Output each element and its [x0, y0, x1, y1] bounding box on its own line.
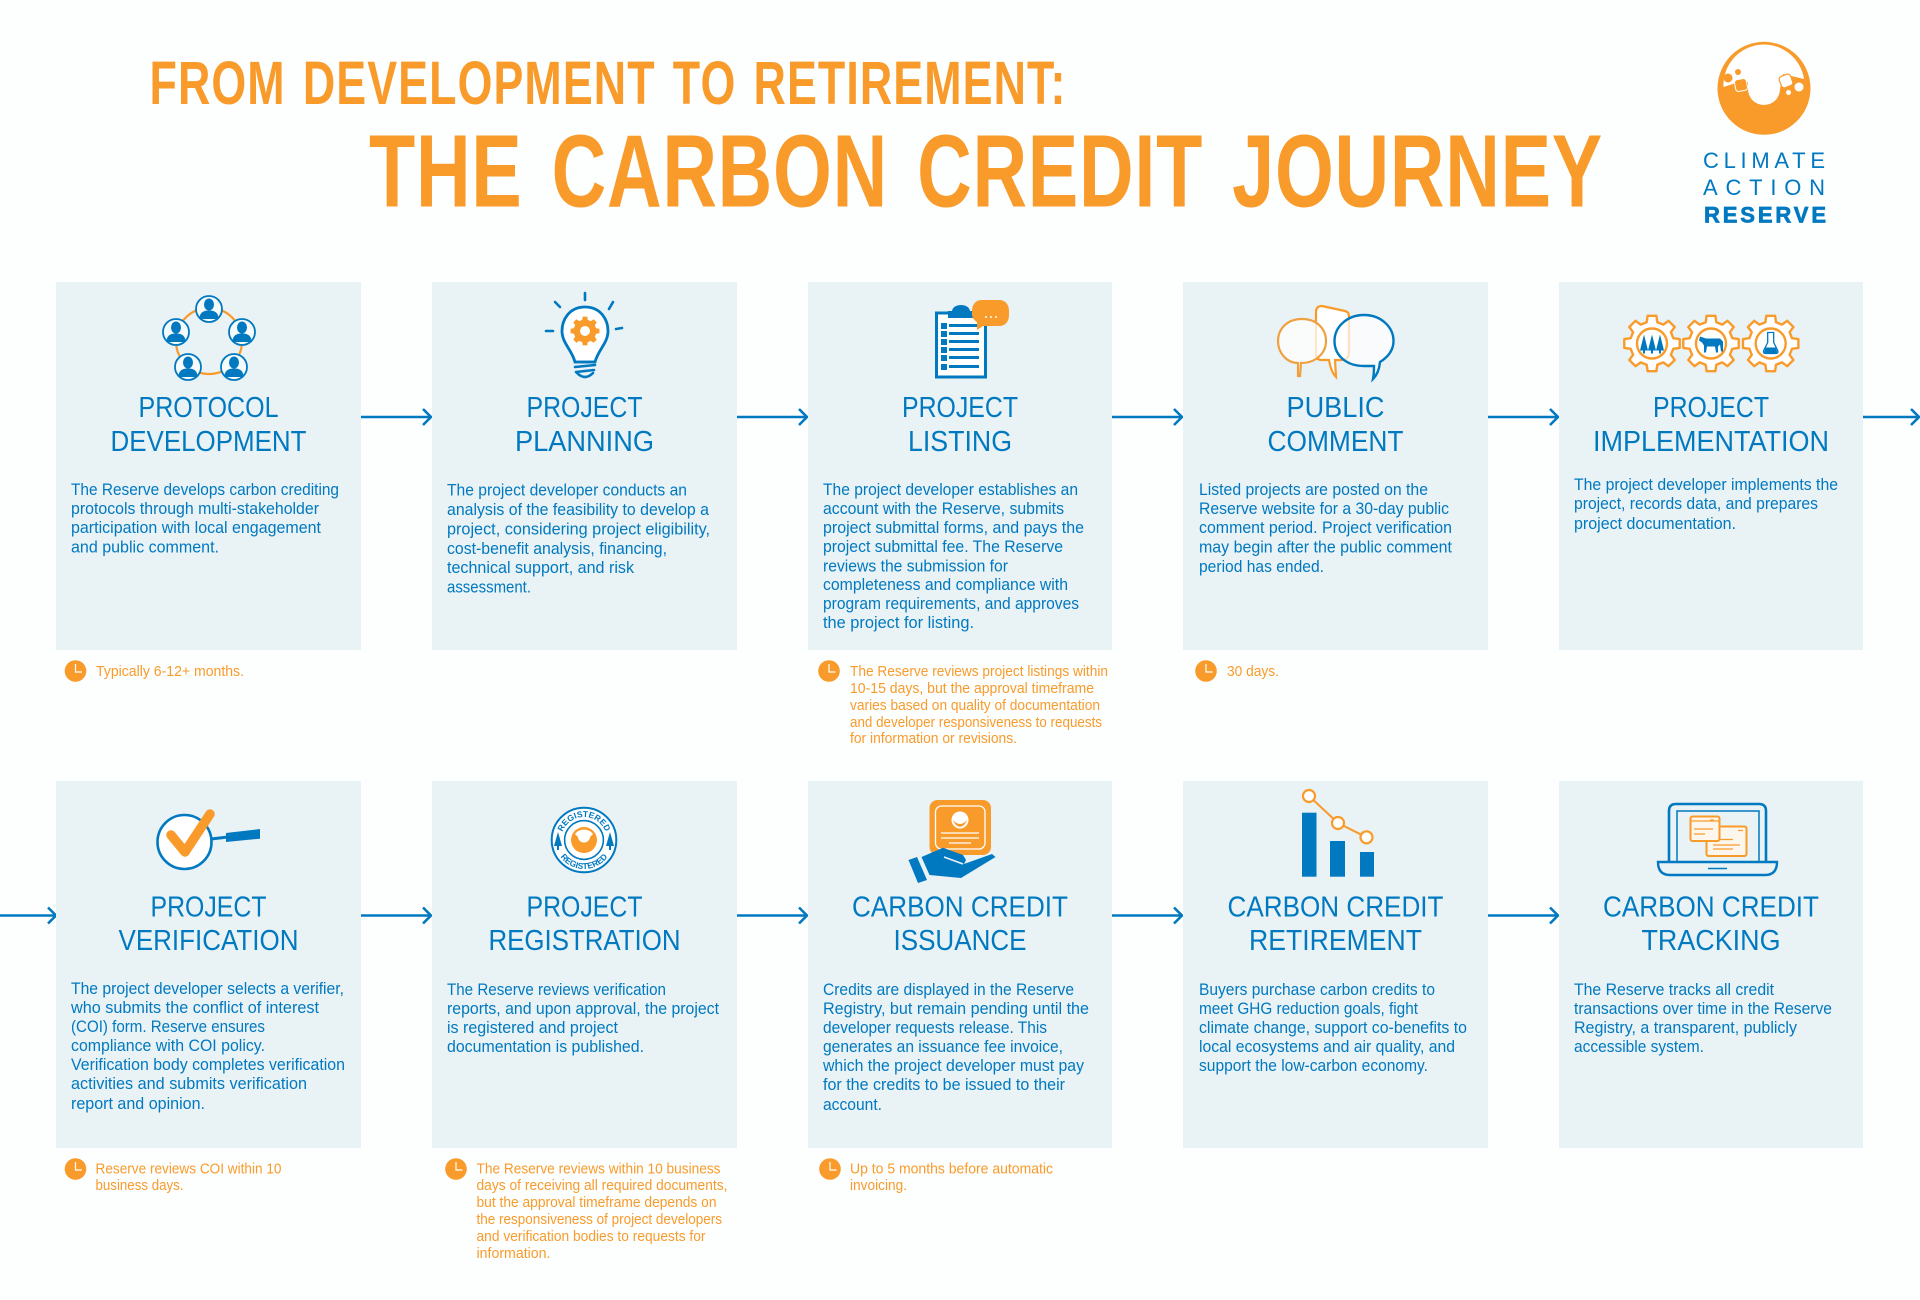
body text: the project for listing.: [823, 613, 974, 632]
body text: who submits the conflict of interest: [70, 998, 319, 1017]
logo wordmark: RESERVE: [1704, 202, 1826, 228]
arrow: [1112, 409, 1182, 425]
icon: clock: [445, 1158, 467, 1180]
heading: [902, 392, 1018, 458]
logo: Climate Action Reserve: [1703, 42, 1826, 228]
body text: [1199, 980, 1467, 1075]
body text: analysis of the feasibility to develop a: [447, 500, 710, 519]
body text: Registry, but remain pending until the: [823, 999, 1089, 1018]
arrow: [737, 409, 807, 425]
body text: The project developer establishes an: [823, 480, 1078, 499]
panel: carbon credit issuance: [808, 781, 1112, 1148]
arrow: [361, 409, 431, 425]
arrow: [361, 908, 431, 924]
body text: [70, 979, 345, 1113]
panel background: [56, 282, 361, 650]
icon: light bulb with gear: [546, 293, 622, 377]
note text: [476, 1160, 728, 1262]
panel background: [1559, 781, 1863, 1148]
logo wordmark: CLIMATE: [1703, 148, 1825, 173]
body text: [1574, 980, 1832, 1056]
icon: clock: [65, 1158, 86, 1180]
icon: declining bar chart: [1302, 790, 1374, 877]
body text: may begin after the public comment: [1199, 538, 1452, 556]
body text: which the project developer must pay: [822, 1056, 1084, 1075]
body text: meet GHG reduction goals, fight: [1199, 999, 1418, 1018]
heading: CARBON CREDIT: [852, 892, 1068, 924]
heading: [1268, 392, 1404, 458]
body text: generates an issuance fee invoice,: [823, 1037, 1063, 1056]
heading: PROJECT: [1653, 392, 1769, 424]
heading: TRACKING: [1642, 925, 1780, 957]
icon: laptop with windows: [1658, 804, 1777, 875]
icon: three gears: [1624, 316, 1798, 371]
body text: comment period. Project verification: [1199, 518, 1452, 537]
note text: and developer responsiveness to requests: [850, 714, 1102, 731]
body text: Registry, a transparent, publicly: [1574, 1018, 1797, 1037]
note text: The Reserve reviews within 10 business: [476, 1160, 720, 1178]
body text: [1199, 480, 1452, 576]
heading: [852, 892, 1068, 957]
heading: PROTOCOL: [138, 392, 278, 424]
note text: invoicing.: [850, 1177, 907, 1194]
note text: information.: [476, 1245, 550, 1262]
body text: The Reserve develops carbon crediting: [71, 480, 339, 499]
note text: the responsiveness of project developers: [476, 1211, 722, 1228]
body text: account.: [823, 1095, 882, 1114]
heading: [118, 892, 298, 957]
arrow: [1112, 908, 1182, 924]
panel: project verification: [56, 781, 361, 1148]
panel background: [808, 781, 1112, 1148]
panel background: [808, 282, 1112, 650]
note text: [96, 1160, 282, 1194]
note text: 10-15 days, but the approval timeframe: [850, 680, 1094, 697]
body text: The project developer conducts an: [447, 480, 687, 500]
body text: is registered and project: [447, 1018, 618, 1037]
body text: compliance with COI policy.: [71, 1036, 265, 1055]
icon: registered seal: REGISTERED: [557, 811, 610, 832]
heading: CARBON CREDIT: [1603, 892, 1819, 924]
body text: The Reserve tracks all credit: [1574, 980, 1774, 999]
heading: PROJECT: [526, 392, 643, 424]
note text: but the approval timeframe depends on: [476, 1194, 716, 1211]
icon: people network: [163, 296, 255, 380]
note text: Typically 6-12+ months.: [96, 663, 244, 680]
heading: [1228, 892, 1444, 957]
panel: project planning: [432, 282, 737, 650]
timing note: project listing: [818, 660, 1108, 747]
panel background: [1559, 282, 1863, 650]
body text: protocols through multi-stakeholder: [71, 499, 319, 518]
body text: local ecosystems and air quality, and: [1199, 1037, 1455, 1056]
note text: Up to 5 months before automatic: [850, 1160, 1053, 1178]
body text: Listed projects are posted on the: [1199, 480, 1428, 499]
body text: climate change, support co-benefits to: [1199, 1018, 1467, 1037]
body text: reports, and upon approval, the project: [447, 999, 719, 1018]
body text: project, considering project eligibility,: [447, 520, 710, 538]
note text: and verification bodies to requests for: [476, 1228, 706, 1245]
heading: PROJECT: [150, 892, 267, 924]
logo mark: [1718, 42, 1810, 135]
panel: project implementation: [1559, 282, 1863, 650]
note text: [850, 1160, 1053, 1194]
icon: speech bubbles: [1278, 306, 1394, 379]
timing note: carbon credit issuance: [819, 1158, 1053, 1194]
arrow: [0, 908, 56, 924]
body text: [447, 980, 719, 1056]
timing note: project verification: [65, 1158, 282, 1194]
body text: Reserve website for a 30-day public: [1199, 499, 1449, 518]
heading: VERIFICATION: [118, 925, 298, 957]
heading: PROJECT: [526, 892, 643, 924]
body text: activities and submits verification: [71, 1074, 307, 1093]
panel: protocol development: [56, 282, 361, 650]
body text: report and opinion.: [71, 1094, 205, 1113]
body text: (COI) form. Reserve ensures: [71, 1017, 265, 1036]
body text: participation with local engagement: [71, 518, 321, 537]
body text: Credits are displayed in the Reserve: [823, 980, 1074, 999]
panel: project registration: [432, 781, 737, 1148]
heading: RETIREMENT: [1249, 925, 1422, 957]
heading: LISTING: [908, 426, 1012, 458]
body text: cost-benefit analysis, financing,: [447, 539, 667, 558]
title: [150, 49, 1603, 228]
icon: clipboard with speech bubble: [936, 300, 1009, 377]
note text: days of receiving all required documents,: [476, 1177, 728, 1194]
timing note: public comment: [1195, 660, 1279, 682]
heading: REGISTRATION: [488, 925, 680, 957]
arrow: [1488, 409, 1558, 425]
heading: [515, 392, 654, 458]
body text: documentation is published.: [447, 1037, 644, 1056]
icon: hand holding certificate: [908, 800, 996, 883]
panel background: [1183, 781, 1488, 1148]
arrow: [737, 908, 807, 924]
heading: PROJECT: [902, 392, 1018, 424]
timing note: project registration: [445, 1158, 728, 1262]
body text: transactions over time in the Reserve: [1574, 999, 1832, 1018]
body text: reviews the submission for: [823, 556, 1008, 576]
body text: completeness and compliance with: [823, 575, 1068, 594]
heading: COMMENT: [1268, 426, 1404, 458]
body text: Buyers purchase carbon credits to: [1199, 980, 1435, 999]
icon: clock: [1195, 660, 1217, 682]
body text: assessment.: [447, 578, 531, 596]
icon: registered seal: [550, 806, 618, 874]
timing note: protocol development: [65, 660, 244, 682]
body text: [1574, 475, 1838, 533]
panel: project listing: [808, 282, 1112, 650]
arrow: [1863, 409, 1919, 425]
body text: accessible system.: [1574, 1037, 1704, 1056]
panel background: [56, 781, 361, 1148]
body text: The project developer implements the: [1574, 475, 1838, 494]
note text: Reserve reviews COI within 10: [96, 1160, 282, 1178]
body text: [71, 480, 339, 556]
body text: support the low-carbon economy.: [1199, 1056, 1428, 1075]
body text: project submittal fee. The Reserve: [823, 537, 1063, 556]
heading: [1593, 392, 1829, 458]
body text: and public comment.: [71, 538, 219, 556]
note text: business days.: [96, 1177, 184, 1194]
body text: The project developer selects a verifier,: [71, 979, 344, 998]
note text: [850, 663, 1108, 747]
note text: for information or revisions.: [850, 730, 1017, 747]
arrow: [1488, 908, 1558, 924]
heading: PLANNING: [515, 426, 654, 458]
icon: clock: [818, 660, 840, 682]
body text: project documentation.: [1574, 514, 1736, 533]
panel: carbon credit tracking: [1559, 781, 1863, 1148]
heading: [110, 392, 307, 458]
icon: clock: [65, 660, 86, 682]
body text: period has ended.: [1199, 557, 1324, 576]
icon: magnifying glass with check: [158, 814, 260, 869]
body text: developer requests release. This: [823, 1018, 1047, 1037]
body text: project submittal forms, and pays the: [823, 518, 1084, 537]
heading: IMPLEMENTATION: [1593, 426, 1829, 458]
body text: project, records data, and prepares: [1574, 494, 1818, 513]
note text: 30 days.: [1227, 663, 1279, 680]
body text: for the credits to be issued to their: [823, 1075, 1065, 1094]
panel: public comment: [1183, 282, 1488, 650]
panel background: [432, 282, 737, 650]
heading: [488, 892, 680, 957]
logo wordmark: ACTION: [1703, 175, 1825, 200]
logo wordmark: [1703, 148, 1826, 228]
heading: [1603, 892, 1819, 957]
icon: registered seal: REGISTERED: [560, 854, 606, 869]
panel background: [432, 781, 737, 1148]
heading: PUBLIC: [1286, 392, 1384, 424]
heading: DEVELOPMENT: [110, 426, 307, 458]
panel background: [1183, 282, 1488, 650]
panel: carbon credit retirement: [1183, 781, 1488, 1148]
icon: clock: [819, 1158, 841, 1180]
body text: technical support, and risk: [447, 558, 634, 577]
note text: varies based on quality of documentation: [850, 697, 1100, 714]
body text: The Reserve reviews verification: [447, 980, 666, 999]
body text: [823, 480, 1084, 632]
title: FROM DEVELOPMENT TO RETIREMENT:: [150, 49, 1066, 118]
heading: CARBON CREDIT: [1228, 892, 1444, 924]
body text: [822, 980, 1089, 1114]
body text: account with the Reserve, submits: [823, 499, 1064, 518]
heading: ISSUANCE: [894, 925, 1026, 957]
note text: The Reserve reviews project listings within: [850, 663, 1108, 680]
body text: Verification body completes verification: [71, 1055, 345, 1074]
body text: [447, 480, 710, 596]
body text: program requirements, and approves: [823, 594, 1079, 613]
